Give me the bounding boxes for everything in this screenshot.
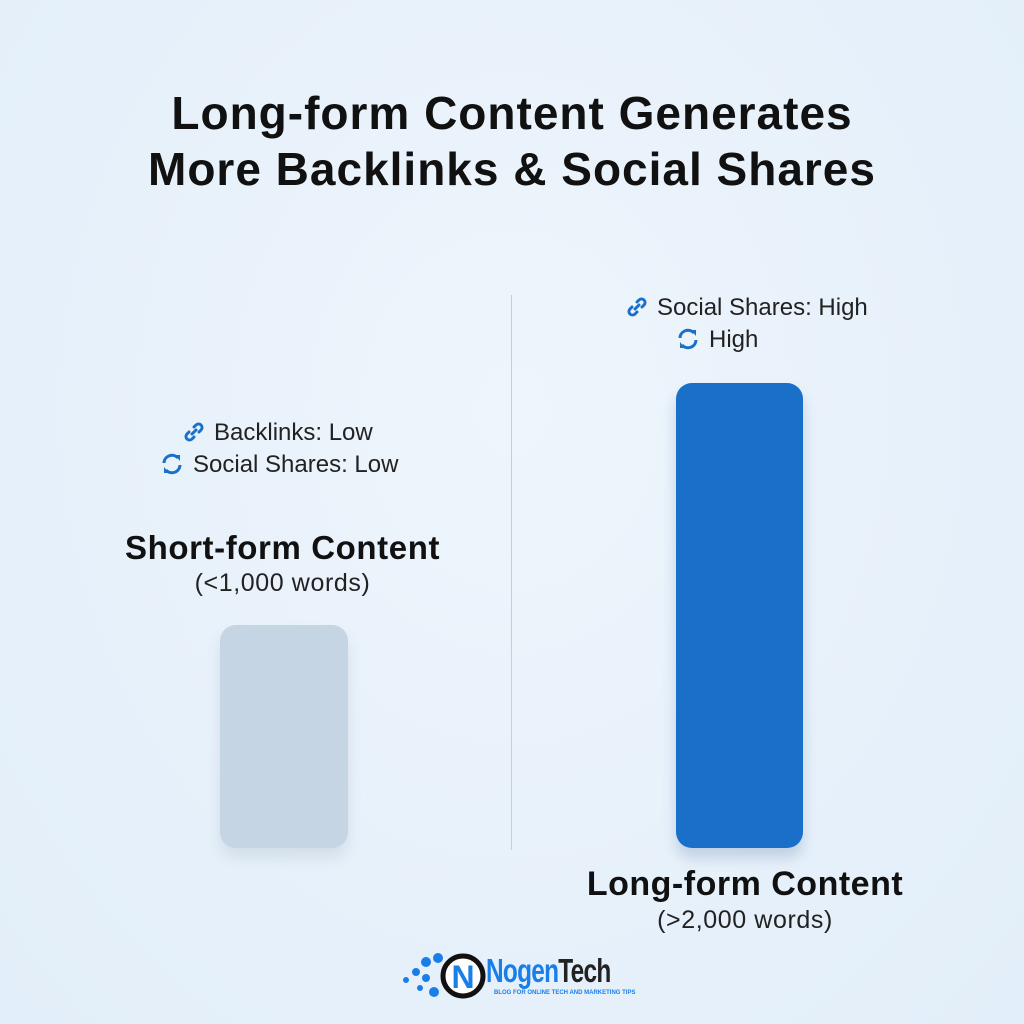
label: long-form: Long-form Content xyxy=(587,865,903,903)
panel: short-form: (<1,000 words) xyxy=(195,569,370,597)
logo: NogenTech xyxy=(486,952,611,989)
panel: long-form xyxy=(587,294,903,934)
label: short-form: Short-form Content xyxy=(125,529,440,566)
stats: short-form: Backlinks: Low xyxy=(214,419,373,446)
logo xyxy=(403,952,636,998)
title: Long-form Content Generates xyxy=(171,87,853,139)
panel: short-form xyxy=(125,419,440,860)
title: More Backlinks & Social Shares xyxy=(148,143,876,195)
stats: short-form: Social Shares: Low xyxy=(193,451,398,478)
stats: long-form xyxy=(628,294,868,353)
stats: long-form: High xyxy=(709,326,758,353)
stats: short-form xyxy=(162,419,398,478)
logo: N xyxy=(451,959,475,995)
stats: long-form: Social Shares: High xyxy=(657,294,868,321)
title xyxy=(148,87,876,195)
bar: short-form xyxy=(220,625,348,848)
divider xyxy=(511,295,512,850)
panel: long-form: (>2,000 words) xyxy=(657,906,833,934)
logo: BLOG FOR ONLINE TECH AND MARKETING TIPS xyxy=(494,990,635,996)
bar: long-form xyxy=(676,383,803,848)
